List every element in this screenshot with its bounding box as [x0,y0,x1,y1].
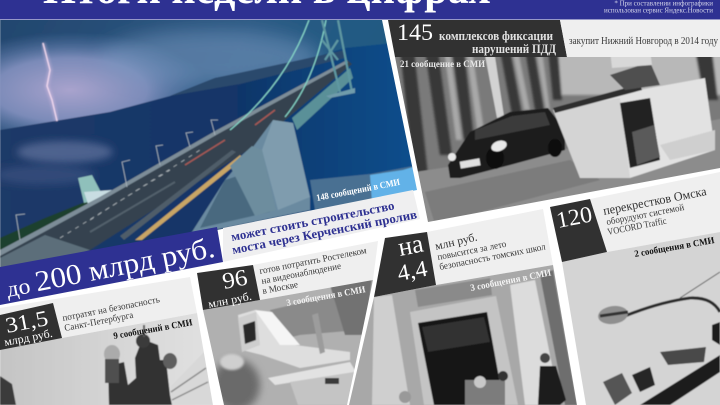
mentions: 2 сообщения в СМИ [634,235,716,260]
description: оборудуют системой [605,202,685,228]
value: на [396,229,426,262]
description: перекрестков Омска [602,184,708,218]
price: до 200 млрд руб. [3,232,217,304]
value: 120 [554,201,594,233]
photo: school door [345,260,580,405]
panel: Tomsk schools [345,209,580,405]
footnote: использован сервис Яндекс.Новости [604,6,713,14]
panel: Nizhny Novgorod traffic cameras [388,20,720,230]
value [3,305,54,349]
value: 96 [220,265,249,294]
light background [590,172,720,252]
heading text: нарушений ПДД [472,42,556,56]
mentions: 21 сообщение в СМИ [400,59,486,70]
footnote [604,0,713,14]
value: млн руб. [207,291,253,311]
panel: Rostelecom Moscow [197,241,380,405]
photo: road camera and car [390,50,720,230]
description: на видеонаблюдение [260,261,342,287]
caption: mentions: 148 сообщений в СМИ [315,177,402,204]
description: млн руб. [434,232,479,253]
description: повысится за лето [437,240,508,263]
dark label [388,20,567,57]
heading text: комплексов фиксации [439,29,553,43]
value [395,229,430,286]
description [259,246,368,297]
mentions: 9 сообщений в СМИ [113,317,194,342]
description: может стоить строительство [230,199,396,244]
description: в Москве [262,280,299,297]
dark label [550,199,607,262]
photo: CCTV camera [200,275,380,405]
panel: Omsk intersections [550,172,720,405]
dark label [0,303,62,350]
price band [0,227,223,305]
heading text [439,29,556,56]
light background [427,209,553,285]
light label [560,20,720,57]
value: 31,5 [3,305,50,338]
dark label [374,232,436,297]
light background [253,241,378,300]
panel: Kerch bridge [0,15,425,305]
mentions: 3 сообщения в СМИ [286,284,367,309]
description: потратят на безопасность [61,294,161,324]
dark label [197,265,260,310]
header band [0,0,720,20]
number: 145 [397,20,433,45]
value: млрд руб. [3,328,54,349]
photo: bridge at dusk [0,15,425,275]
light background [0,277,197,347]
photo: cathedral [0,313,213,405]
value: 4,4 [395,256,430,286]
description [602,184,708,238]
description: готов потратить Ростелеком [259,246,368,277]
description: моста через Керченский пролив [231,207,418,257]
description: Санкт-Петербурга [63,310,135,334]
description: VOCORD Traffic [606,216,667,238]
panel: Saint Petersburg [0,277,220,405]
photo: street light and cameras [555,225,720,405]
mentions: 3 сообщения в СМИ [469,267,553,294]
value [207,265,253,311]
description panel [223,190,420,262]
description: безопасность томских школ [438,241,547,273]
